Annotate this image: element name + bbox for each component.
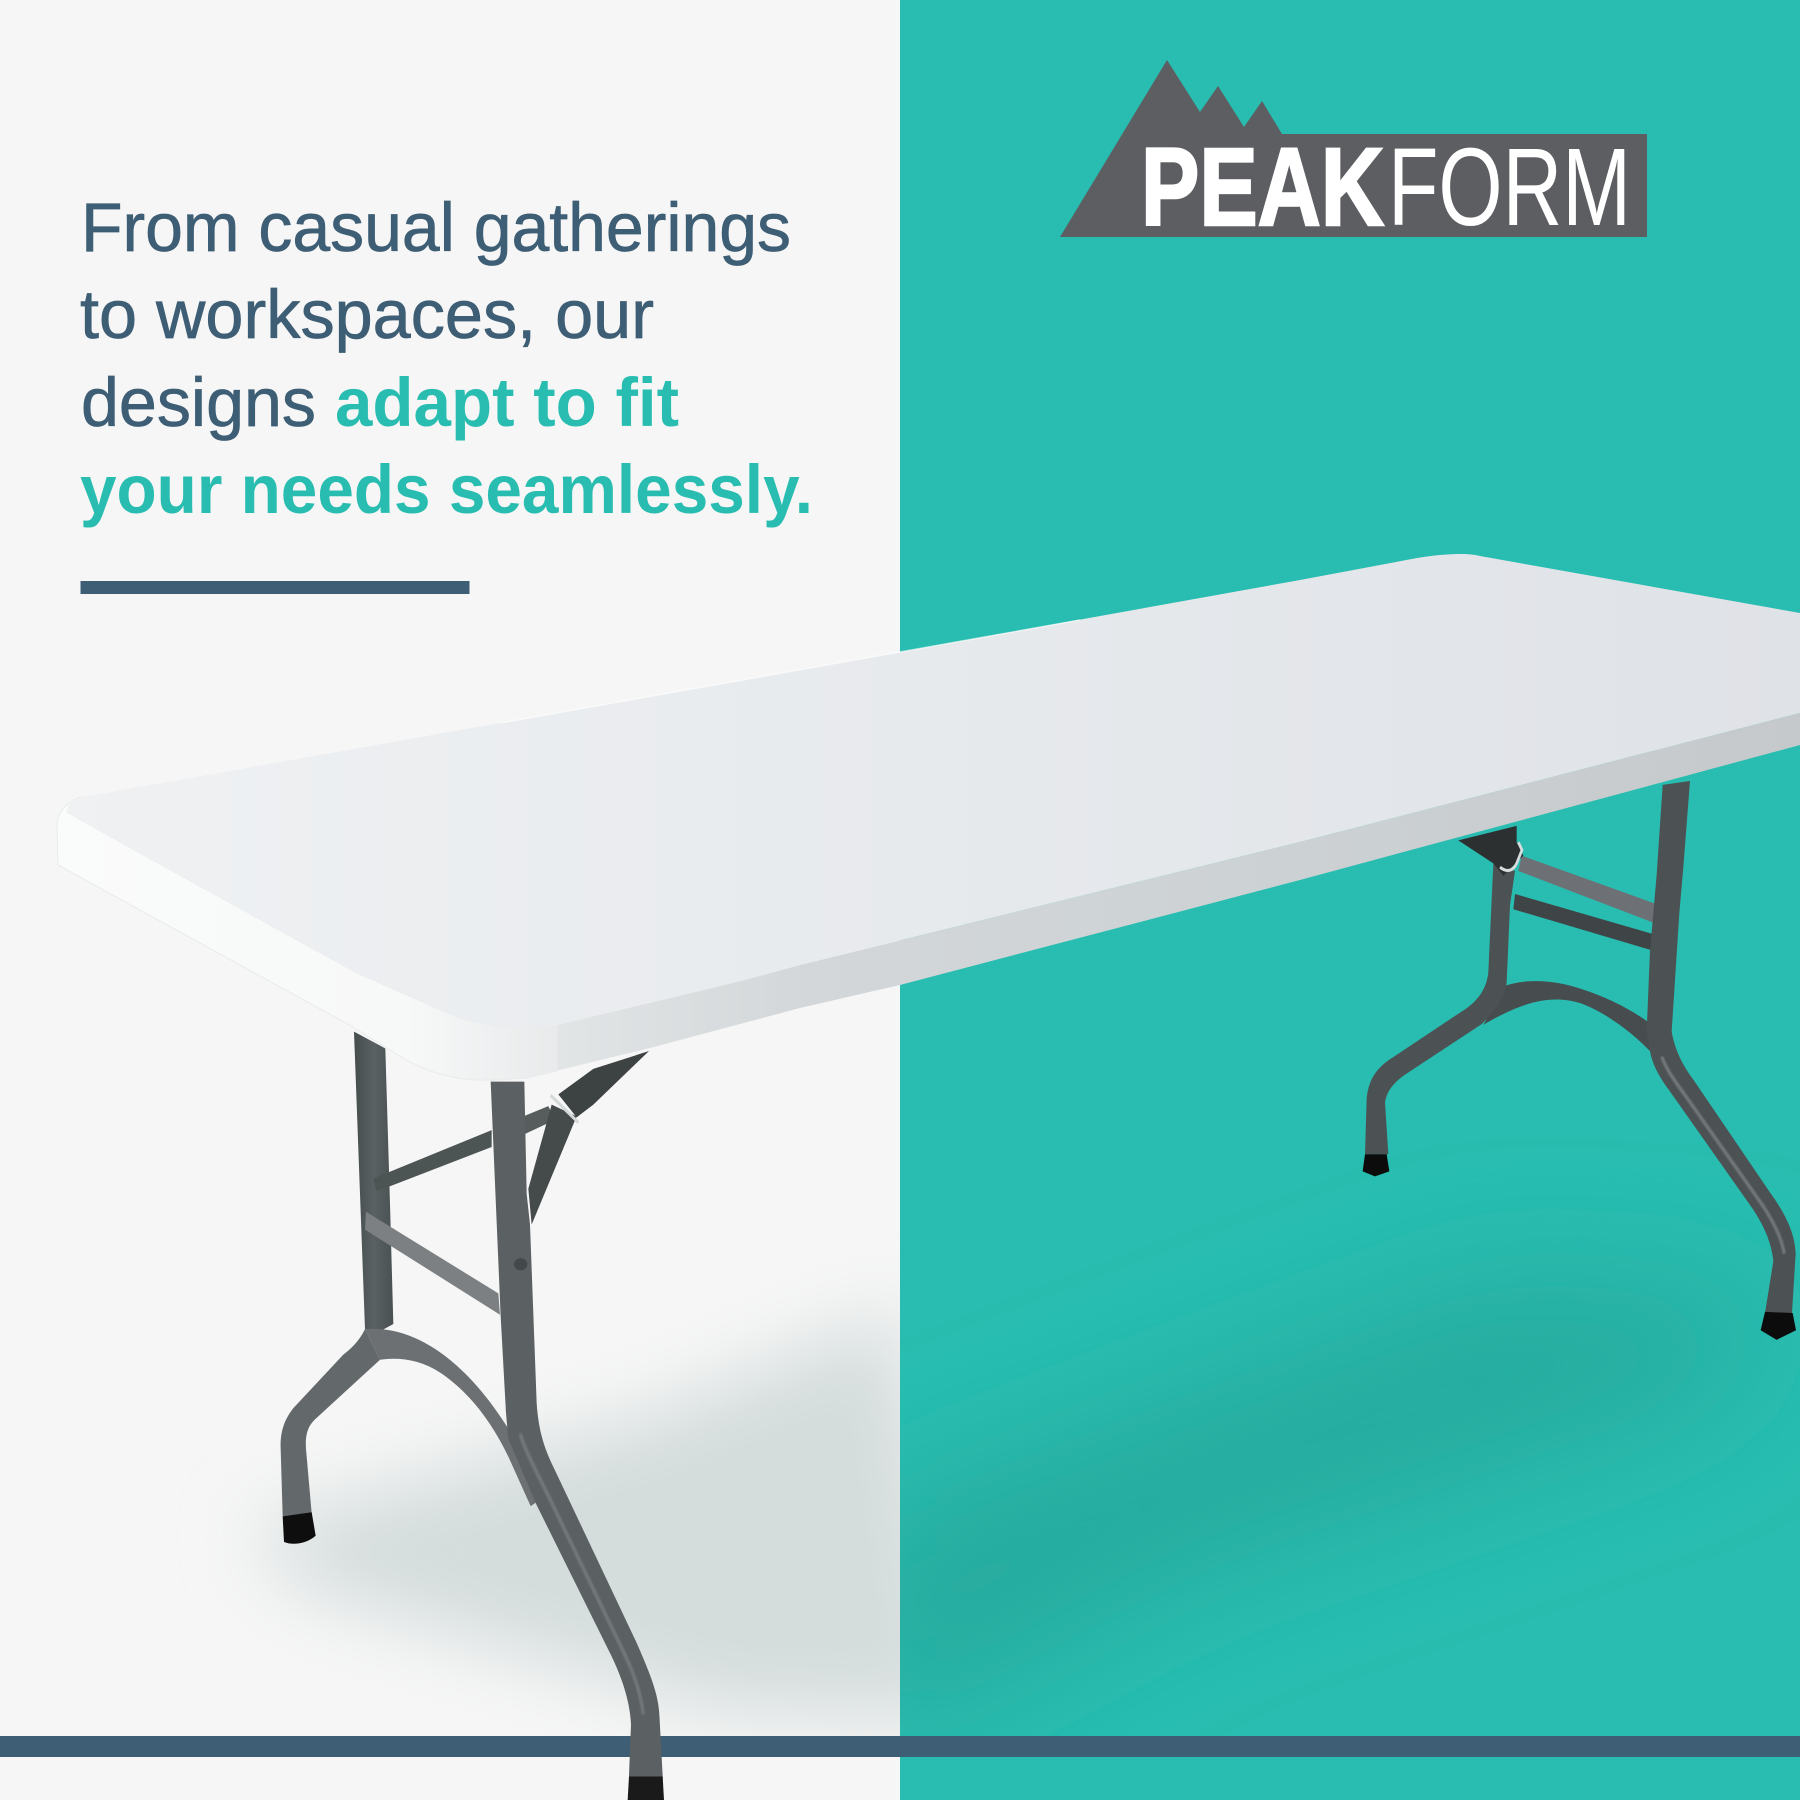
rear leg tube (1365, 863, 1515, 1154)
diagonal brace (528, 1105, 577, 1224)
front foot cap (628, 1777, 664, 1800)
curved brace (1483, 981, 1652, 1053)
line 3 highlight: adapt to fit (335, 364, 679, 441)
rear foot cap (1363, 1154, 1389, 1176)
panel: left light background (0, 0, 900, 1800)
floor shadow on teal panel (900, 1281, 1707, 1703)
logo mountain shape (1060, 60, 1647, 237)
logo word PEAK: PEAK (1141, 126, 1384, 249)
back leg tube (354, 1032, 393, 1337)
hinge bracket (558, 1051, 649, 1117)
line 4 highlight: your needs seamlessly. (80, 451, 813, 528)
headline underline rule (80, 581, 470, 594)
headline text (80, 189, 813, 528)
top bracket (1458, 826, 1523, 876)
leg highlight (520, 1434, 643, 1714)
foot cap (283, 1512, 316, 1544)
curved brace (365, 1329, 536, 1506)
strut end (523, 1106, 555, 1135)
foot arm tube (281, 1329, 380, 1516)
table top (57, 554, 1800, 1081)
front foot cap (1761, 1312, 1796, 1340)
back edge highlight (500, 620, 1080, 723)
line 2: to workspaces, our (80, 276, 654, 353)
hinge ring (551, 1095, 578, 1122)
table: left leg frame (281, 1032, 664, 1800)
table: right leg frame (1363, 781, 1796, 1340)
panel: right teal background (900, 0, 1800, 1800)
bottom bar (0, 1736, 1800, 1757)
line 1: From casual gatherings (81, 189, 791, 266)
logo word FORM: FORM (1388, 126, 1631, 249)
strut between tubes (373, 1130, 492, 1191)
line 3 regular: designs (81, 364, 316, 441)
front leg tube (491, 1082, 663, 1800)
front leg tube (1647, 781, 1796, 1313)
floor shadow on light panel (250, 1310, 960, 1720)
lower cross bar (1513, 894, 1653, 950)
leg highlight (1662, 1057, 1784, 1254)
left rim edge (57, 797, 557, 1080)
leg bolt (514, 1258, 527, 1270)
front right side edge (490, 713, 1800, 1081)
cross bar (365, 1212, 500, 1315)
top surface (67, 554, 1800, 1027)
bracket ring (1500, 842, 1522, 870)
logo: PeakForm (1060, 60, 1647, 249)
upper cross bar (1518, 856, 1655, 923)
